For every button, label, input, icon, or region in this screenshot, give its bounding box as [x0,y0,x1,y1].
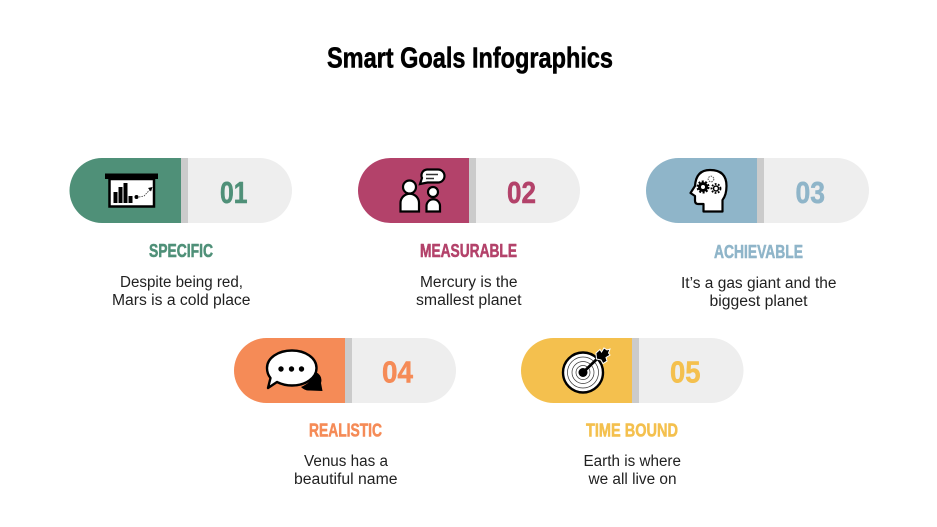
description: time bound: Earth is where [584,453,681,470]
description: achievable [681,275,836,310]
description: measurable: Mercury is the [420,274,518,291]
description: specific: Despite being red, [120,274,243,291]
description: specific [112,274,250,309]
number 02: 02 [507,175,536,210]
panel: time bound [521,338,744,488]
heading: time bound: TIME BOUND [586,420,678,440]
heading: realistic: REALISTIC [309,420,382,440]
description: measurable [416,274,522,309]
icon: presentation chart [105,174,158,206]
heading: measurable: MEASURABLE [420,240,517,261]
description: time bound: we all live on [588,471,676,488]
description: realistic: Venus has a [304,453,388,470]
description: achievable: It’s a gas giant and the [681,275,836,292]
pill: realistic [234,338,456,403]
icon: speech bubbles [267,350,322,391]
title: Smart Goals Infographics [327,42,613,74]
panel: achievable [646,158,869,310]
heading: specific: SPECIFIC [149,240,213,261]
description: specific: Mars is a cold place [112,292,250,309]
heading: achievable: ACHIEVABLE [714,241,803,262]
description: time bound [584,453,681,488]
pill: specific [70,158,292,223]
icon: two people talking [400,170,445,212]
description: realistic [294,453,398,488]
number 05: 05 [670,354,700,390]
description: measurable: smallest planet [416,292,522,309]
panel: measurable [358,158,580,309]
panel: specific [70,158,292,309]
number 04: 04 [382,354,414,390]
number 01: 01 [220,175,248,210]
panel: realistic [234,338,456,488]
number 03: 03 [796,175,825,210]
icon: target with arrow [563,348,610,392]
description: realistic: beautiful name [294,471,398,488]
icon: head with gears [690,170,726,212]
description: achievable: biggest planet [710,293,808,310]
pill: measurable [358,158,580,223]
pill: time bound [521,338,744,403]
pill: achievable [646,158,869,223]
